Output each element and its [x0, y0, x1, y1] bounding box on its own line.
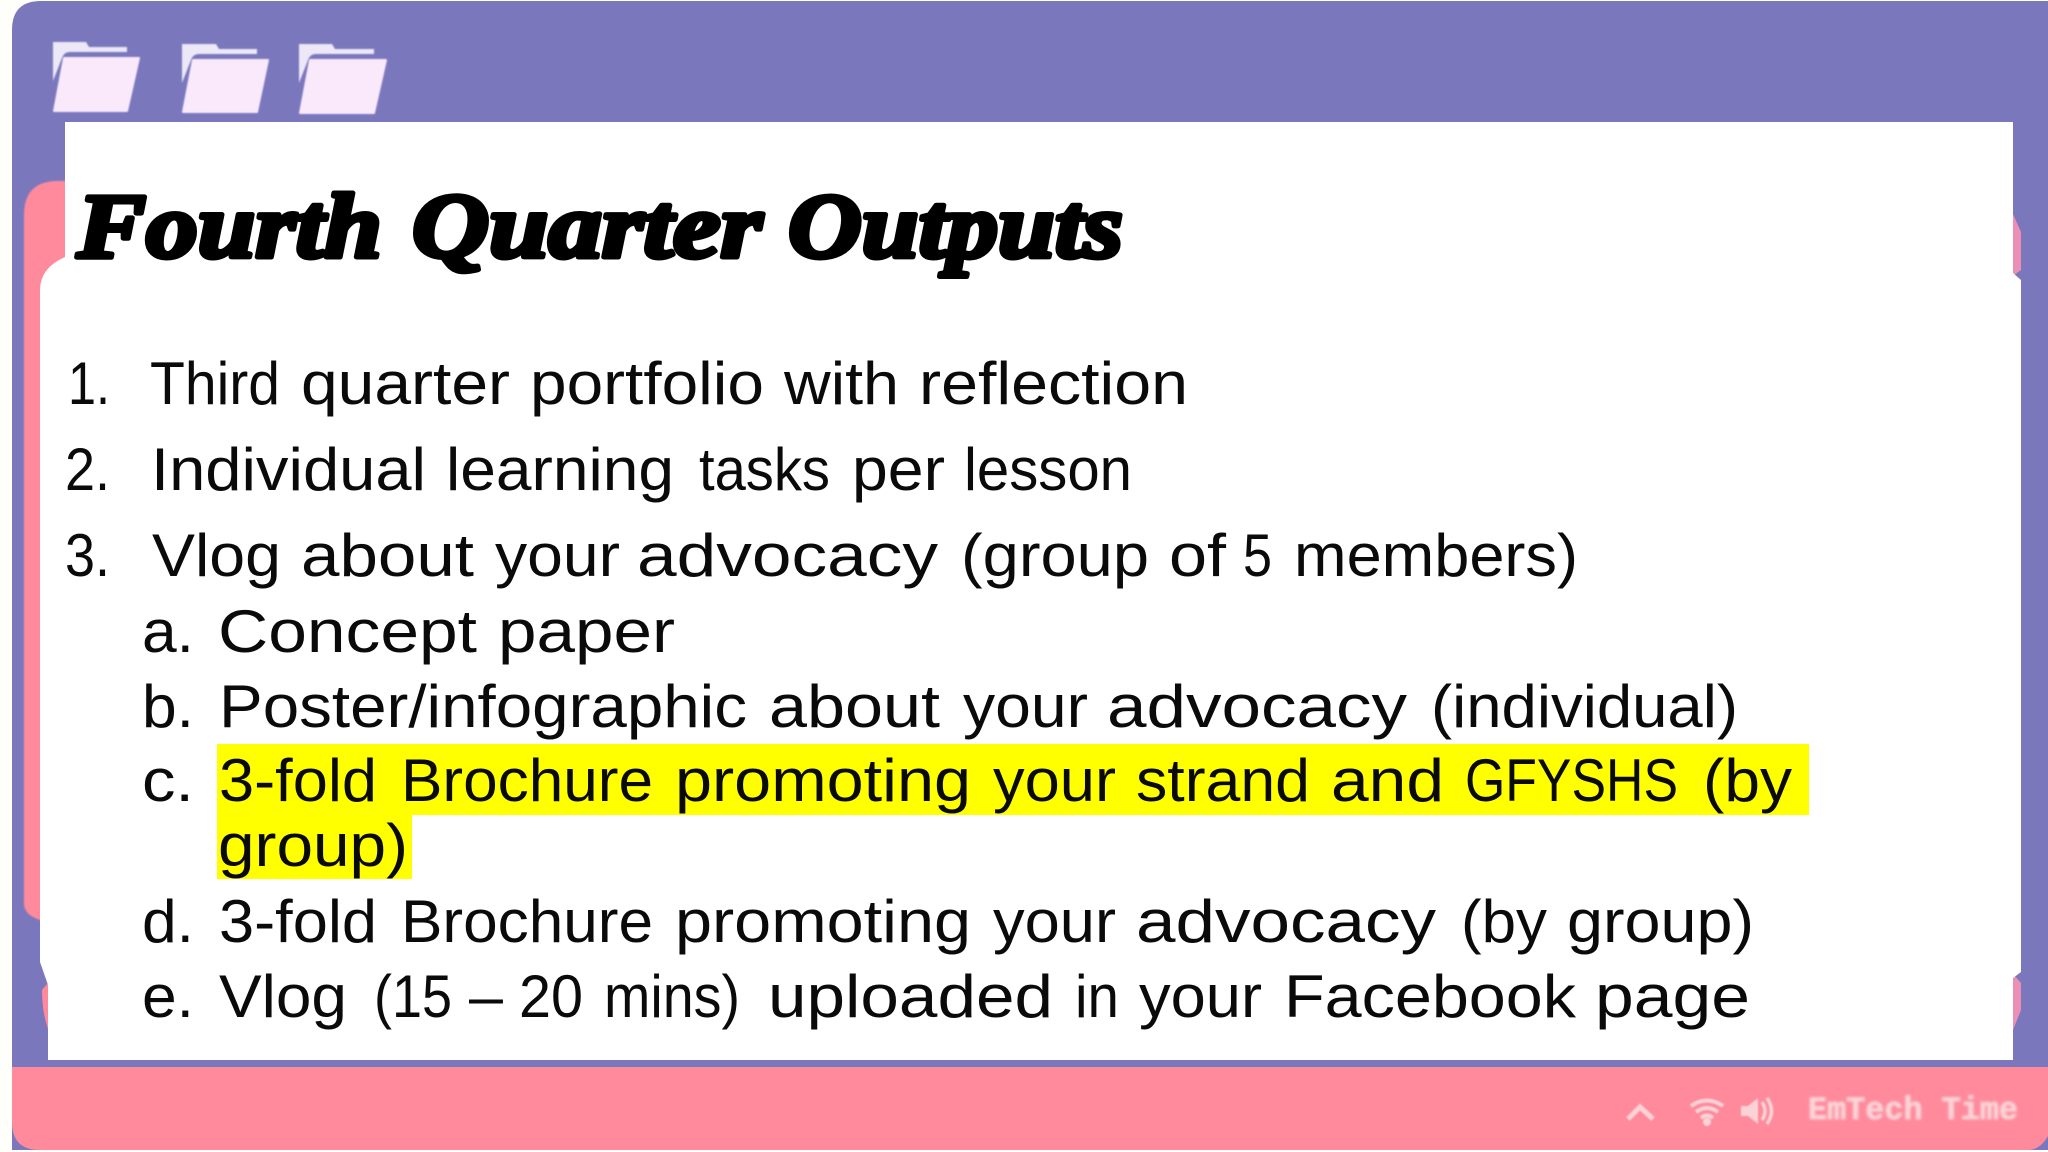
item 2: tasks: [699, 436, 830, 503]
title: Quarter: [412, 175, 763, 277]
text: main list: [65, 350, 1792, 1030]
panel: right pink tab: [2005, 214, 2021, 276]
sub-item c: Brochure: [401, 747, 653, 814]
icon: speaker: [1741, 1098, 1772, 1124]
item 1: Third: [150, 350, 280, 417]
panel: left pink tab: [24, 181, 70, 1029]
sub-item e: your: [1139, 963, 1262, 1030]
highlight: item c: [217, 744, 1809, 879]
item 3: 3.: [65, 522, 110, 589]
sub-item c: c.: [142, 747, 194, 814]
icon: wifi: [1691, 1100, 1723, 1124]
sub-item a: a.: [142, 598, 194, 665]
sub-item e: mins): [604, 963, 740, 1030]
sub-item b: Poster/infographic: [219, 673, 747, 740]
panel: right lower pink tab: [2005, 975, 2021, 1030]
item 2: lesson: [964, 436, 1132, 503]
item 3: Vlog: [152, 522, 281, 589]
sub-item d: 3-fold: [219, 888, 377, 955]
icon: folder 2: [182, 44, 268, 112]
sub-item d: advocacy: [1136, 888, 1436, 955]
sub-item a: Concept: [218, 598, 477, 665]
sub-item c: promoting: [675, 747, 971, 814]
sub-item b: (individual): [1431, 673, 1738, 740]
title: Outputs: [788, 175, 1123, 277]
taskbar label: EmTech Time: [1808, 1092, 2018, 1129]
item 2: Individual: [151, 436, 426, 503]
sub-item e: Facebook: [1284, 963, 1577, 1030]
sub-item b: your: [963, 673, 1088, 740]
sub-item c: GFYSHS: [1465, 747, 1678, 814]
item 3: 5: [1243, 522, 1272, 589]
item 3: advocacy: [637, 522, 938, 589]
sub-item e: –: [469, 963, 504, 1030]
item 1: reflection: [919, 350, 1188, 417]
sub-item c: strand: [1136, 747, 1310, 814]
sub-item b: b.: [142, 673, 194, 740]
sub-item e: e.: [142, 963, 194, 1030]
sub-item d: d.: [142, 888, 194, 955]
sub-item e: (15: [374, 963, 452, 1030]
sub-item c: and: [1331, 747, 1444, 814]
item 1: quarter: [301, 350, 510, 417]
item 3: members): [1294, 522, 1578, 589]
sub-item d: Brochure: [401, 888, 653, 955]
icon: tray chevron: [1628, 1107, 1653, 1119]
item 1: 1.: [68, 350, 110, 417]
item 2: 2.: [65, 436, 110, 503]
sub-item e: in: [1075, 963, 1119, 1030]
item 3: your: [495, 522, 620, 589]
item 1: with: [783, 350, 899, 417]
sub-item c continued: group): [218, 812, 408, 879]
sub-item d: group): [1567, 888, 1754, 955]
title: Fourth: [76, 175, 382, 277]
sub-item a: paper: [498, 598, 675, 665]
sub-item e: 20: [519, 963, 583, 1030]
panel: bottom taskbar: [12, 1067, 2048, 1150]
item 3: of: [1169, 522, 1226, 589]
item 2: learning: [446, 436, 674, 503]
item 3: about: [301, 522, 474, 589]
sub-item c: (by: [1703, 747, 1792, 814]
icon: folder 3: [299, 44, 386, 113]
icon: folder 1: [53, 42, 139, 111]
sub-item c: 3-fold: [219, 747, 377, 814]
sub-item d: promoting: [675, 888, 971, 955]
sub-item d: your: [993, 888, 1116, 955]
sub-item e: Vlog: [219, 963, 347, 1030]
sub-item e: page: [1595, 963, 1750, 1030]
item 2: per: [852, 436, 945, 503]
item 3: (group: [961, 522, 1149, 589]
sub-item c: your: [993, 747, 1116, 814]
sub-item d: (by: [1461, 888, 1547, 955]
panel: white content area: [40, 122, 2021, 1060]
item 1: portfolio: [530, 350, 764, 417]
sub-item b: about: [769, 673, 940, 740]
sub-item b: advocacy: [1107, 673, 1407, 740]
sub-item e: uploaded: [768, 963, 1053, 1030]
